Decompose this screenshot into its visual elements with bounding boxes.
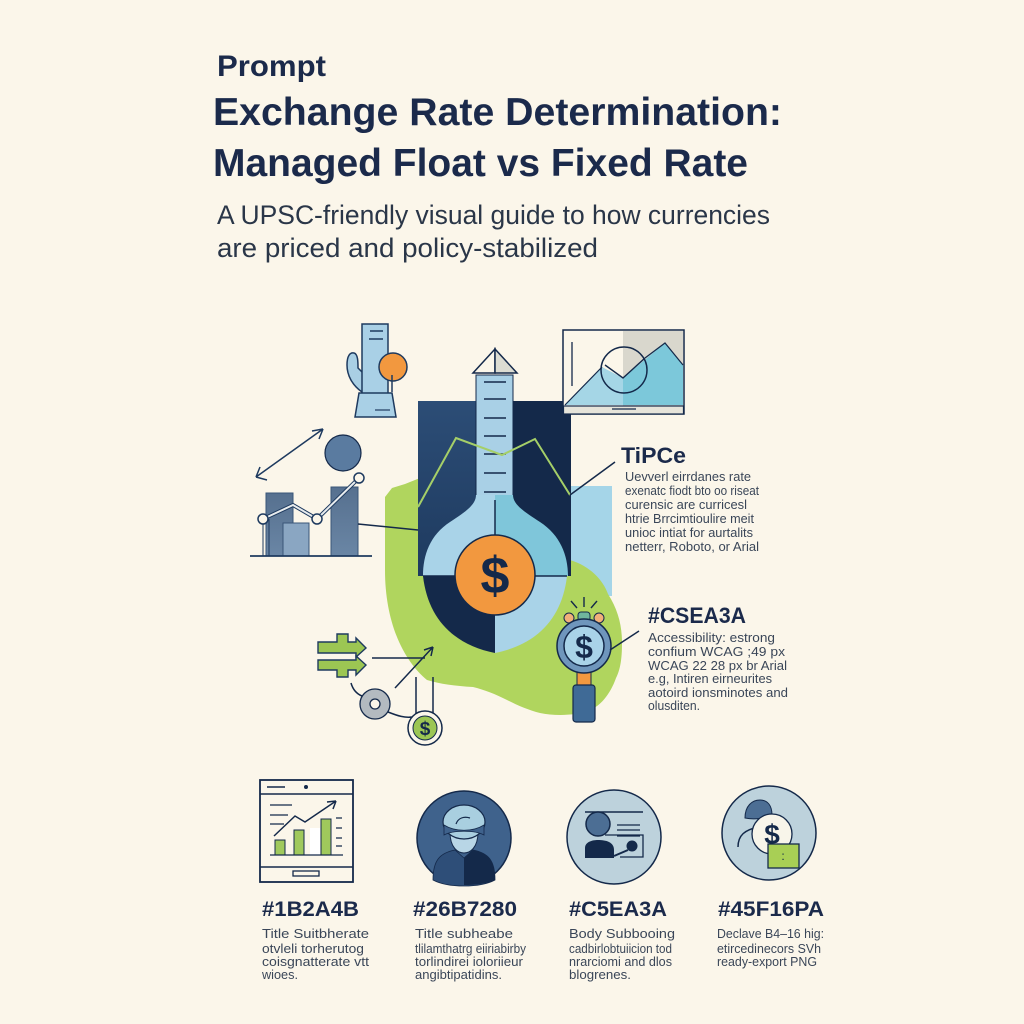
- column 1: #1B2A4B: coisgnatterate vtt: [262, 954, 369, 969]
- column 4: #45F16PA: ready-export PNG: [717, 954, 817, 969]
- green trend line: [418, 438, 570, 507]
- column 3: #C5EA3A: [567, 790, 675, 982]
- icon: monitor with mountain chart: [563, 330, 684, 414]
- icon: person with dollar and green box: $: [764, 819, 780, 850]
- callout: #CSEA3A: Accessibility: estrong: [648, 630, 775, 645]
- icon: magnifier with dollar: [557, 597, 639, 722]
- tower arrow head: [473, 349, 517, 373]
- subtitle: are priced and policy-stabilized: [217, 233, 598, 263]
- column 1: #1B2A4B: [260, 780, 369, 982]
- title: [213, 91, 782, 185]
- callout: TiPCe: TiPCe: [621, 443, 686, 468]
- callout: TiPCe: unioc intiat for aurtalits: [625, 525, 753, 540]
- icon: tablet with bar chart: [260, 780, 353, 882]
- navy panel: [418, 401, 571, 576]
- callout: TiPCe: curensic are curricesl: [625, 497, 747, 512]
- title: Managed Float vs Fixed Rate: [213, 142, 748, 185]
- column 2: #26B7280: [413, 791, 526, 982]
- callout: #CSEA3A: olusditen.: [648, 698, 700, 713]
- callout: #CSEA3A: confium WCAG ;49 px: [648, 644, 786, 659]
- column 3: #C5EA3A: cadbirlobtuiicion tod: [569, 941, 672, 956]
- light blue backing panel: [571, 486, 612, 596]
- column 4: #45F16PA: [717, 786, 824, 969]
- central illustration: [385, 349, 622, 715]
- icon: small green dollar coin: $: [420, 719, 431, 740]
- callout: TiPCe: Uevverl eirrdanes rate: [625, 469, 751, 484]
- column 3: #C5EA3A: nrarciomi and dlos: [569, 954, 672, 969]
- column 1: #1B2A4B: #1B2A4B: [262, 898, 359, 921]
- column 2: #26B7280: Title subheabe: [415, 926, 513, 941]
- icon: hand with document and coin: [347, 324, 407, 417]
- column 2: #26B7280: tlilamthatrg eiiriabirby: [415, 941, 526, 956]
- heading block: [213, 50, 782, 263]
- icon: presenter with screen: [567, 790, 661, 884]
- column 4: #45F16PA: #45F16PA: [718, 898, 824, 921]
- column 2: #26B7280: angibtipatidins.: [415, 967, 502, 982]
- subtitle: A UPSC-friendly visual guide to how currencies: [217, 200, 770, 230]
- icon: dollar coin: [455, 535, 535, 615]
- icon: gear disc: [360, 689, 390, 719]
- icon: person with dollar and green box: [722, 786, 816, 880]
- column 2: #26B7280: #26B7280: [413, 898, 517, 921]
- icon: green exchange arrows: [318, 634, 366, 677]
- eyebrow: Prompt: Prompt: [217, 50, 326, 83]
- icon: dollar coin: $: [481, 547, 510, 605]
- callout: TiPCe: exenatc fiodt bto oo riseat: [625, 483, 759, 498]
- column 2: #26B7280: torlindirei ioloriieur: [415, 954, 524, 969]
- column 1: #1B2A4B: Title Suitbherate: [262, 926, 369, 941]
- flask and shield: [423, 375, 568, 653]
- icon: person with helmet: [417, 791, 511, 886]
- column 1: #1B2A4B: wioes.: [261, 967, 298, 982]
- icon: small green dollar coin: [408, 711, 442, 745]
- tower tick marks: [484, 382, 506, 492]
- callout: #CSEA3A: e.g, Intiren eirneurites: [648, 671, 772, 686]
- arrow and connector lines: [351, 647, 433, 717]
- column 4: #45F16PA: Declave B4–16 hig:: [717, 926, 824, 941]
- column 4: #45F16PA: etircedinecors SVh: [717, 941, 821, 956]
- column 1: #1B2A4B: otvleli torherutog: [262, 941, 364, 956]
- icon: person with dollar and green box: :: [781, 849, 785, 863]
- callout: TiPCe: [570, 443, 759, 554]
- bar and line chart: [250, 429, 418, 556]
- callout: #CSEA3A: WCAG 22 28 px br Arial: [648, 658, 787, 673]
- icon: magnifier with dollar: $: [575, 629, 593, 665]
- callout: #CSEA3A: #CSEA3A: [648, 603, 746, 628]
- callout: TiPCe: netterr, Roboto, or Arial: [625, 539, 759, 554]
- column 3: #C5EA3A: blogrenes.: [569, 967, 631, 982]
- callout: #CSEA3A: [648, 603, 788, 713]
- column 3: #C5EA3A: #C5EA3A: [569, 898, 667, 921]
- green blob: [385, 478, 622, 715]
- callout: #CSEA3A: aotoird ionsminotes and: [648, 685, 788, 700]
- callout: TiPCe: htrie Brrcimtioulire meit: [625, 511, 754, 526]
- column 3: #C5EA3A: Body Subbooing: [569, 926, 675, 941]
- subtitle: [217, 200, 770, 263]
- title: Exchange Rate Determination:: [213, 91, 782, 134]
